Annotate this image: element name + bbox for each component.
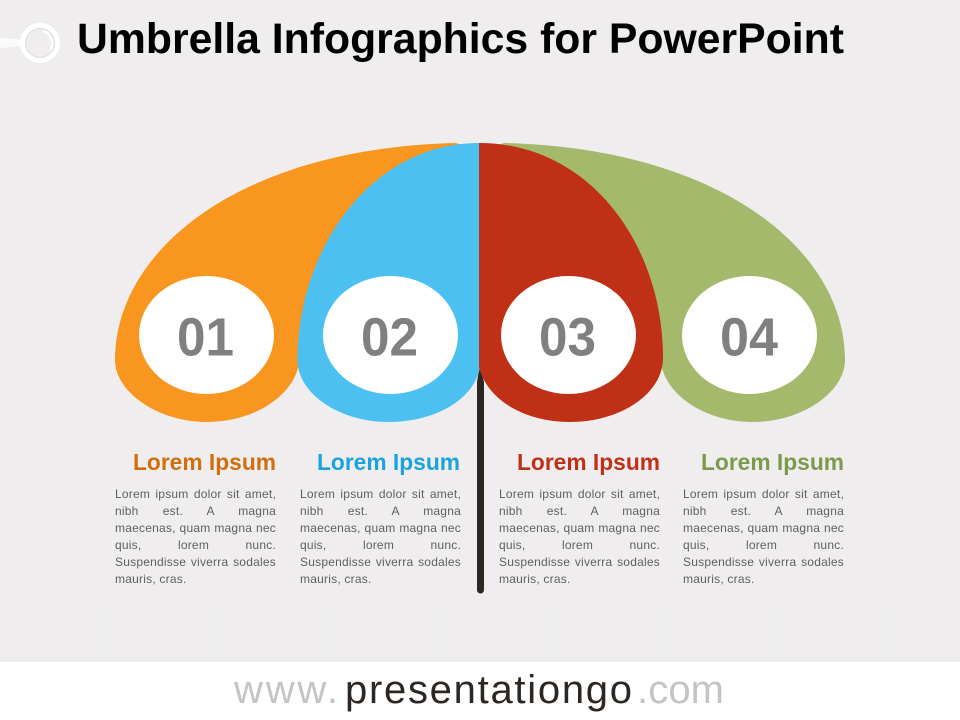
badge 03: 03 [539, 308, 596, 368]
text block 04: quis, lorem nunc. [683, 538, 844, 552]
badge 01 [139, 276, 274, 394]
text block 01: Suspendisse viverra sodales [115, 555, 276, 569]
text block 03 [499, 487, 660, 586]
heading: Lorem Ipsum orange: Lorem Ipsum [133, 449, 276, 475]
text block 02 [300, 487, 461, 586]
text block 02: Suspendisse viverra sodales [300, 555, 461, 569]
icon: ring with bar [0, 26, 58, 60]
text block 01: Lorem ipsum dolor sit amet, [115, 487, 276, 501]
heading: Lorem Ipsum red: Lorem Ipsum [517, 449, 660, 475]
footer url: www. [233, 668, 338, 712]
footer url: presentationgo [345, 668, 632, 712]
text block 01: mauris, cras. [115, 572, 187, 586]
footer url [233, 668, 724, 712]
text block 02: nibh est. A magna [300, 504, 461, 518]
badge 01: 01 [177, 308, 234, 368]
footer url: .com [637, 668, 724, 712]
text block 01: quis, lorem nunc. [115, 538, 276, 552]
badge 04 [682, 276, 817, 394]
badge 02: 02 [361, 308, 418, 368]
text block 04: maecenas, quam magna nec [683, 521, 844, 535]
title: Umbrella Infographics for PowerPoint [77, 15, 844, 63]
badge 02 [323, 276, 458, 394]
text block 04: mauris, cras. [683, 572, 755, 586]
panel: orange canopy segment 01 [115, 143, 475, 422]
text block 01: nibh est. A magna [115, 504, 276, 518]
text block 04: Lorem ipsum dolor sit amet, [683, 487, 844, 501]
text block 02: mauris, cras. [300, 572, 372, 586]
text block 03: Suspendisse viverra sodales [499, 555, 660, 569]
panel: blue canopy segment 02 [298, 143, 480, 422]
badge 04: 04 [720, 308, 778, 368]
text block 03: Lorem ipsum dolor sit amet, [499, 487, 660, 501]
heading: Lorem Ipsum blue: Lorem Ipsum [317, 449, 460, 475]
text block 04 [683, 487, 844, 586]
text block 03: maecenas, quam magna nec [499, 521, 660, 535]
panel: red canopy segment 03 [479, 143, 663, 422]
text block 01 [115, 487, 276, 586]
text block 02: quis, lorem nunc. [300, 538, 461, 552]
text block 03: quis, lorem nunc. [499, 538, 660, 552]
panel: green canopy segment 04 [485, 143, 845, 422]
text block 01: maecenas, quam magna nec [115, 521, 276, 535]
badge 03 [501, 276, 636, 394]
text block 03: nibh est. A magna [499, 504, 660, 518]
text block 03: mauris, cras. [499, 572, 571, 586]
text block 04: nibh est. A magna [683, 504, 844, 518]
text block 02: Lorem ipsum dolor sit amet, [300, 487, 461, 501]
text block 04: Suspendisse viverra sodales [683, 555, 844, 569]
heading: Lorem Ipsum green: Lorem Ipsum [701, 449, 844, 475]
text block 02: maecenas, quam magna nec [300, 521, 461, 535]
umbrella handle [477, 367, 484, 594]
